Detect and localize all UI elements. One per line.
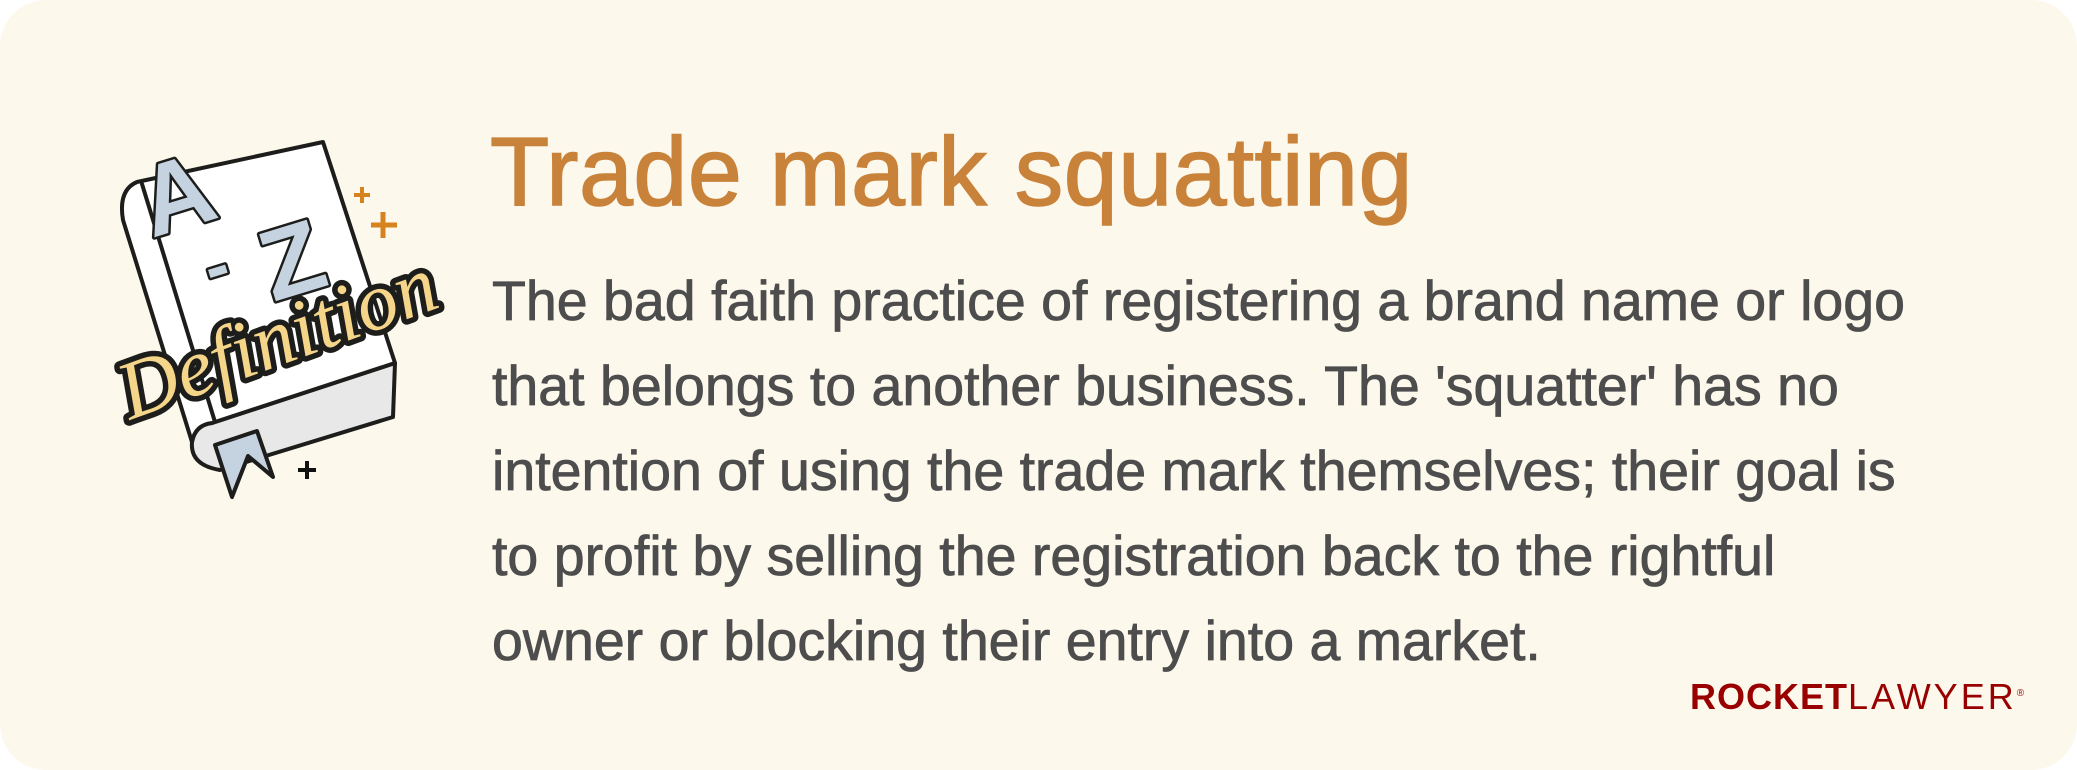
letters A-Z: A (126, 131, 227, 259)
letters A-Z: - (194, 225, 239, 306)
body text: intention of using the trade mark themselves; their goal is (492, 440, 1896, 502)
body text: that belongs to another business. The 'squatter' has no (492, 355, 1839, 417)
body text (492, 270, 1905, 672)
body text: owner or blocking their entry into a market. (492, 610, 1541, 672)
title: Trade mark squatting (490, 117, 1413, 226)
Definition script: Definition (104, 238, 449, 437)
letters A-Z (126, 131, 338, 323)
body text: The bad faith practice of registering a brand name or logo (492, 270, 1905, 332)
page block (192, 363, 395, 470)
icon: A-Z definition book (104, 131, 449, 500)
body text: to profit by selling the registration back to the rightful (492, 525, 1775, 587)
sparkles (298, 187, 397, 479)
letters A-Z: Z (247, 198, 338, 323)
logo: Rocket Lawyer: ROCKETLAWYER® (1690, 676, 2025, 717)
bookmark (215, 431, 273, 497)
cover (122, 142, 395, 442)
